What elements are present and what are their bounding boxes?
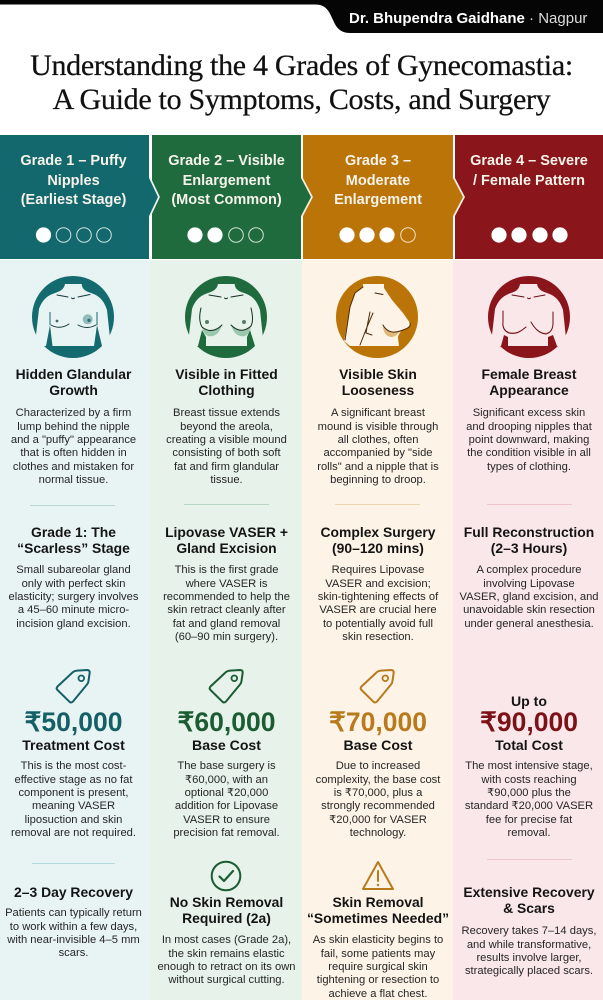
surgery text: involving Lipovase [483,578,575,590]
icon: female pattern torso [484,272,574,362]
icon: price tag [56,669,91,704]
icon: warning triangle [362,861,394,890]
recovery text: results involve larger, [476,952,582,964]
recovery heading [455,884,603,917]
icon: side view torso [336,276,418,358]
cost text: This is the most cost- [21,760,126,772]
surgery text [455,564,603,631]
cost label: Base Cost [344,736,412,752]
symptom heading: Appearance [489,382,569,398]
skin removal text: achieve a flat chest. [329,988,427,1000]
surgery heading: (2–3 Hours) [491,540,567,556]
grade 3 heading: Grade 3 – [345,153,411,169]
skin removal text [157,934,296,986]
surgery text: unavoidable skin resection [463,604,595,616]
up to label: Up to [511,693,547,709]
surgery text: where VASER is [186,578,267,590]
cost text: Due to increased [336,760,420,772]
grade 3 heading [334,153,422,208]
symptom heading: Looseness [342,382,414,398]
cost text: ₹90,000 plus the [487,787,571,799]
surgery text: skin-tightening effects of [318,591,438,603]
recovery text [455,925,603,979]
panel: grade 2 [150,153,302,1000]
recovery text: with near-invisible 4–5 mm [7,934,140,946]
symptom text: all clothes, often [338,434,418,446]
grade 3 heading: Enlargement [334,192,422,208]
skin removal heading: “Sometimes Needed” [307,910,449,926]
surgery text: Requires Lipovase [332,564,424,576]
panel background [150,260,302,1000]
surgery heading [320,524,436,556]
grade 2 heading: Enlargement [183,173,270,189]
symptom text [166,407,287,486]
grade 1 heading [20,153,127,208]
cost text [316,760,440,839]
cost text: technology. [350,827,406,839]
author name: Dr. Bhupendra Gaidhane · Nagpur [349,10,587,27]
grade 3 heading: Moderate [346,173,410,189]
skin removal heading: Required (2a) [182,910,271,926]
cost text: meaning VASER [32,800,115,812]
price: ₹60,000 [178,707,275,737]
recovery heading: Extensive Recovery [463,884,595,900]
cost text: strongly recommended [321,800,435,812]
cost text: precision fat removal. [173,827,280,839]
cost text: complexity, the base cost [316,774,440,786]
icon: price tag [208,669,244,704]
symptom text: point downward, making [469,434,589,446]
recovery text: Recovery takes 7–14 days, [462,925,596,937]
cost text [173,760,280,839]
surgery heading: Lipovase VASER + [165,524,288,540]
title: Understanding the 4 Grades of Gynecomastia: [30,49,573,82]
icon: puffy nipple torso [32,276,114,358]
price: ₹70,000 [329,707,427,737]
recovery text: scars. [59,947,88,959]
severity dots [339,227,416,243]
grade 2 heading: Grade 2 – Visible [168,153,285,169]
symptom text: Characterized by a firm [16,407,131,419]
cost text: standard ₹20,000 VASER [465,800,593,812]
icon: check circle [210,860,242,892]
symptom text: beyond the areola, [180,421,273,433]
symptom heading: Visible in Fitted [175,366,278,382]
symptom text: normal tissue. [39,474,108,486]
cost text: addition for Lipovase [175,800,278,812]
cost text: removal are not required. [11,827,136,839]
symptom text: and a "puffy" appearance [11,434,136,446]
symptom text [317,407,439,486]
title: A Guide to Symptoms, Costs, and Surgery [53,83,550,116]
symptom text: creating a visible mound [166,434,287,446]
symptom text: types of clothing. [487,461,571,473]
recovery text [5,907,142,959]
recovery heading: 2–3 Day Recovery [14,884,133,900]
surgery heading: “Scarless” Stage [17,540,130,556]
severity dots [36,227,112,243]
symptom text [11,407,136,486]
symptom text: that is often hidden in [20,447,127,459]
top bar with author tab [0,0,603,33]
recovery text: and while transformative, [467,939,591,951]
cost text: The most intensive stage, [465,760,593,772]
cost text: effective stage as no fat [15,774,132,786]
panel background [453,260,603,1000]
symptom heading: Growth [49,382,98,398]
surgery heading [17,524,130,556]
surgery text [9,564,138,630]
cost text: removal. [508,827,550,839]
surgery text: under general anesthesia. [464,618,594,630]
panel: grade 4 [455,135,603,1000]
grade 4 heading: / Female Pattern [473,173,585,189]
surgery text: fat and gland removal [173,618,280,630]
cost label: Treatment Cost [22,736,125,752]
symptom text: tissue. [210,474,243,486]
severity dots [187,227,264,243]
grade 1 heading: (Earliest Stage) [21,192,126,208]
symptom heading [175,366,278,398]
price: ₹50,000 [25,707,122,737]
symptom text: clothes and mistaken for [13,461,134,473]
cost text [11,760,136,839]
surgery text: skin resection. [342,631,414,643]
recovery text: strategically placed scars. [465,965,593,977]
cost text: ₹60,000, with an [185,774,268,786]
symptom heading: Clothing [198,382,255,398]
skin removal text: As skin elasticity begins to [313,934,443,946]
recovery text: Patients can typically return [5,907,142,919]
skin removal text: fail, some patients may [321,948,435,960]
surgery text: This is the first grade [175,564,278,576]
cost text: fee for precise fat [486,814,572,826]
cost text: component is present, [18,787,129,799]
symptom heading: Hidden Glandular [16,366,131,382]
surgery text: skin retract cleanly after [167,604,286,616]
surgery text [318,564,438,643]
surgery heading: (90–120 mins) [332,540,424,556]
surgery heading: Complex Surgery [320,524,436,540]
symptom text: rolls" and a nipple that is [317,461,439,473]
symptom text: the condition visible in all [467,447,591,459]
grade 1 heading: Grade 1 – Puffy [20,153,127,169]
symptom text [455,407,603,474]
grade 4 heading: Grade 4 – Severe [470,153,588,169]
symptom text: A significant breast [331,407,425,419]
cost text: with costs reaching [481,774,577,786]
symptom text: mound is visible through [318,421,438,433]
symptom heading [16,366,132,398]
symptom heading: Visible Skin [339,366,417,382]
symptom text: consisting of both soft [172,447,281,459]
symptom text: Significant excess skin [473,407,585,419]
symptom text: fat and firm glandular [174,461,279,473]
cost text: The base surgery is [177,760,276,772]
surgery heading: Grade 1: The [31,524,116,540]
header band with chevrons [0,135,603,259]
skin removal text: require surgical skin [328,961,428,973]
symptom heading: Female Breast [482,366,576,382]
surgery text: recommended to help the [163,591,290,603]
skin removal heading [170,894,283,926]
skin removal text: without surgical cutting. [168,974,285,986]
surgery heading: Full Reconstruction [464,524,594,540]
symptom text: and drooping nipples that [466,421,592,433]
panel background [302,260,453,1000]
surgery text: to potentially avoid full [323,618,433,630]
skin removal text [303,934,453,1000]
title [30,49,573,116]
skin removal heading [307,894,449,926]
skin removal text: enough to retract on its own [157,961,296,973]
cost text: optional ₹20,000 [185,787,268,799]
recovery text: to work within a few days, [10,921,137,933]
skin removal text: In most cases (Grade 2a), [162,934,291,946]
grade 1 heading: Nipples [47,173,100,189]
surgery text: only with perfect skin [22,578,125,590]
icon: price tag [360,669,395,704]
symptom text: beginning to droop. [330,474,426,486]
skin removal heading: No Skin Removal [170,894,283,910]
cost text: is ₹70,000, plus a [334,787,422,799]
icon: visible enlargement torso [185,276,267,358]
cost text [455,760,603,841]
symptom text: Breast tissue extends [173,407,280,419]
surgery heading [455,524,603,557]
skin removal text: the skin remains elastic [168,948,285,960]
cost label: Total Cost [495,736,563,752]
surgery heading [165,524,288,556]
symptom heading [455,366,603,399]
surgery text: VASER are crucial here [319,604,437,616]
symptom heading [339,366,417,398]
surgery text: a 45–60 minute micro- [18,604,129,616]
severity dots [455,227,603,243]
symptom text: accompanied by "side [323,447,433,459]
recovery heading: & Scars [503,900,555,916]
surgery text: (60–90 min surgery). [175,631,278,643]
surgery text: incision gland excision. [16,618,131,630]
surgery text [163,564,290,643]
cost label: Base Cost [192,736,261,752]
surgery text: VASER, gland excision, and [459,591,599,603]
price: ₹90,000 [480,707,578,737]
skin removal heading: Skin Removal [332,894,424,910]
surgery text: A complex procedure [476,564,582,576]
grade 2 heading: (Most Common) [171,192,282,208]
panel: grade 3 [302,153,453,1000]
symptom text: lump behind the nipple [17,421,130,433]
panel background [0,260,150,1000]
cost text: VASER to ensure [183,814,270,826]
cost text: liposuction and skin [25,814,122,826]
skin removal text: tightening or resection to [317,974,439,986]
grade 4 heading [455,152,603,191]
panel: grade 1 [0,153,150,1000]
surgery text: VASER and excision; [325,578,431,590]
surgery text: Small subareolar gland [16,564,131,576]
cost text: ₹20,000 for VASER [329,814,427,826]
grade 2 heading [168,153,285,208]
surgery text: elasticity; surgery involves [9,591,138,603]
surgery heading: Gland Excision [176,540,277,556]
